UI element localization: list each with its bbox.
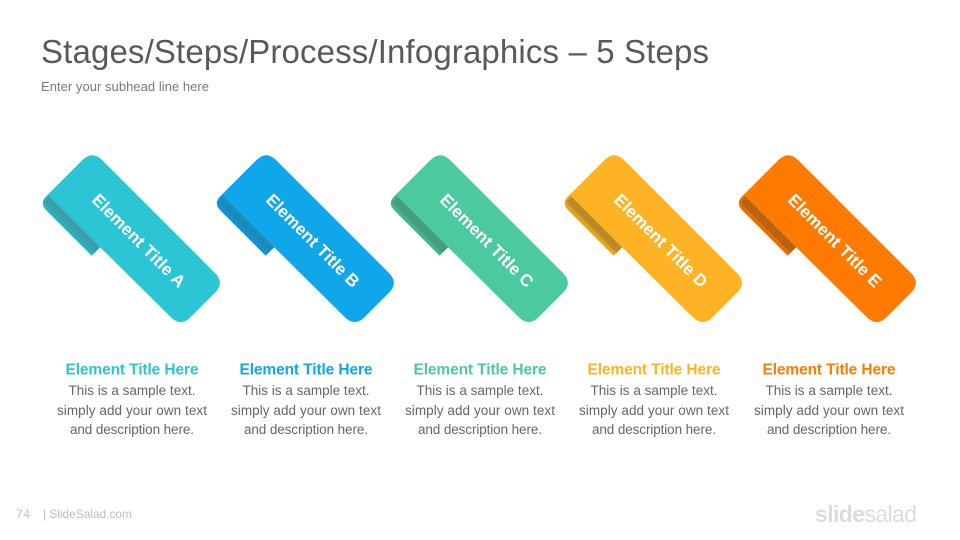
footer site name: | SlideSalad.com	[43, 507, 132, 521]
text block E: simply add your own text	[754, 403, 904, 418]
text block A	[57, 362, 207, 437]
text block E: This is a sample text.	[766, 383, 892, 398]
text block B: and description here.	[244, 422, 368, 437]
text block D: This is a sample text.	[590, 383, 718, 398]
ribbon C	[387, 150, 573, 336]
text block A: Element Title Here	[66, 362, 199, 378]
text block B: simply add your own text	[231, 403, 381, 418]
ribbon C: Element Title C	[436, 190, 537, 291]
text block E: Element Title Here	[762, 362, 896, 378]
text block B	[231, 362, 381, 437]
text block B: This is a sample text.	[242, 383, 370, 398]
text block D: Element Title Here	[588, 362, 721, 378]
text block D: simply add your own text	[579, 403, 729, 418]
ribbon E: Element Title E	[784, 190, 885, 291]
footer page number: 74	[16, 507, 30, 521]
text block C	[405, 362, 555, 437]
text block D	[579, 362, 729, 437]
text block C: Element Title Here	[414, 362, 547, 378]
text block E	[754, 362, 904, 437]
logo: slidesalad	[815, 501, 917, 527]
subhead: Enter your subhead line here	[41, 79, 209, 94]
text block B: Element Title Here	[240, 362, 373, 378]
ribbon E	[735, 150, 921, 336]
text block D: and description here.	[592, 422, 716, 437]
ribbon B	[213, 150, 399, 336]
ribbon D	[561, 150, 747, 336]
ribbon B: Element Title B	[262, 190, 363, 291]
title: Stages/Steps/Process/Infographics – 5 Steps	[41, 33, 709, 70]
ribbon A: Element Title A	[88, 190, 189, 291]
text block C: This is a sample text.	[416, 383, 544, 398]
ribbon A	[39, 150, 225, 336]
text block A: and description here.	[70, 422, 194, 437]
text block C: and description here.	[418, 422, 542, 437]
text block A: This is a sample text.	[68, 383, 196, 398]
text block C: simply add your own text	[405, 403, 555, 418]
ribbon D: Element Title D	[610, 190, 711, 291]
text block E: and description here.	[767, 422, 891, 437]
text block A: simply add your own text	[57, 403, 207, 418]
